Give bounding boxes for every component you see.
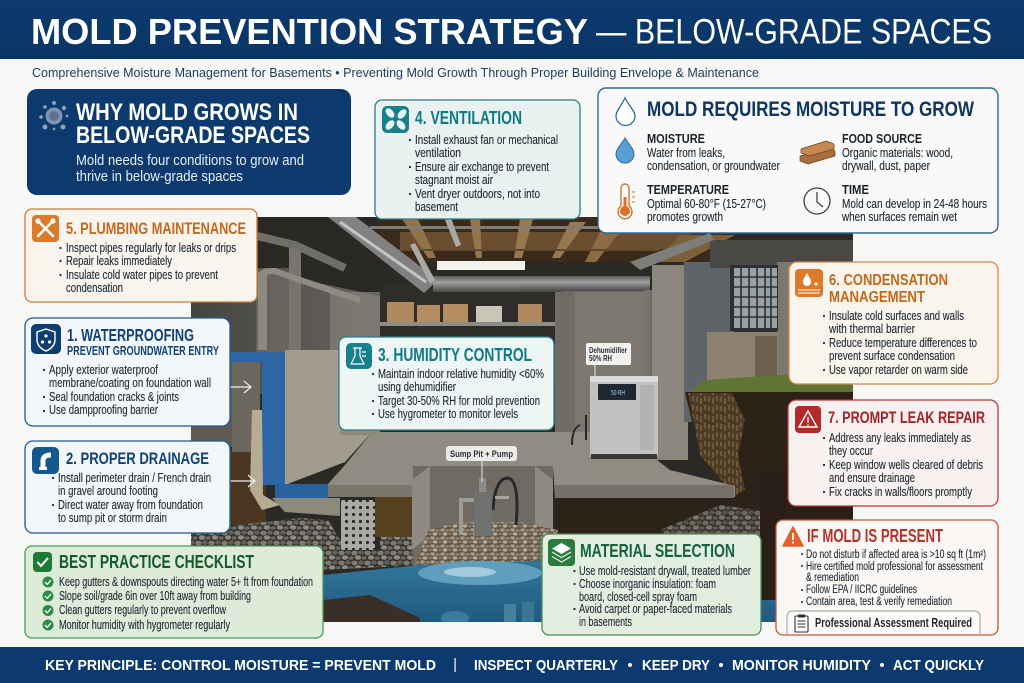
bullet list: they occur xyxy=(829,444,873,458)
bullet list: Fix cracks in walls/floors promptly xyxy=(829,485,973,499)
perforated drain xyxy=(341,500,375,550)
item: temperature: TEMPERATURE xyxy=(647,182,729,197)
bullet list: stagnant moist air xyxy=(415,173,493,187)
description: Mold needs four conditions to grow and xyxy=(76,153,304,169)
item: food source: drywall, dust, paper xyxy=(842,159,930,173)
panel: 3 humidity control xyxy=(339,337,554,430)
icon: drain pipe xyxy=(32,447,59,474)
bullet list xyxy=(823,309,977,377)
item: moisture: Water from leaks, xyxy=(647,146,725,160)
icon: shield xyxy=(31,324,61,354)
bullet list: Contain area, test & verify remediation xyxy=(806,596,952,608)
dehumidifier: 50 RH xyxy=(611,390,625,397)
key principle: KEY PRINCIPLE: CONTROL MOISTURE = PREVENT MOLD xyxy=(45,657,436,674)
action items: INSPECT QUARTERLY xyxy=(474,657,618,674)
callout: sump pit label: Sump Pit + Pump xyxy=(450,449,513,460)
bullet list: Direct water away from foundation xyxy=(58,498,203,512)
bullet list: Insulate cold surfaces and walls xyxy=(829,309,964,323)
panel: 4 ventilation xyxy=(375,100,580,219)
title: MOLD PREVENTION STRATEGY xyxy=(31,11,588,52)
checklist: Monitor humidity with hygrometer regularly xyxy=(59,618,231,632)
bullet list: and ensure drainage xyxy=(829,471,915,485)
icon: clipboard xyxy=(795,614,808,632)
bullet list xyxy=(372,367,544,421)
icon: clock xyxy=(804,188,830,214)
panel: 7 prompt leak repair xyxy=(788,400,998,506)
icon: flask xyxy=(346,343,372,369)
soil left xyxy=(230,450,266,525)
item: food source: Organic materials: wood, xyxy=(842,146,953,160)
bullet list: membrane/coating on foundation wall xyxy=(49,376,211,390)
bullet list xyxy=(823,431,983,499)
bullet list: Target 30-50% RH for mold prevention xyxy=(378,394,540,408)
bullet list: Reduce temperature differences to xyxy=(829,336,977,350)
bullet list: in basements xyxy=(579,615,632,629)
heading: IF MOLD IS PRESENT xyxy=(807,526,943,546)
bullet list: prevent surface condensation xyxy=(829,349,955,363)
bullet list: Install perimeter drain / French drain xyxy=(58,471,211,485)
icon: checkmark badge xyxy=(33,552,52,572)
grass xyxy=(690,374,853,392)
water xyxy=(324,560,776,622)
panel: 1 waterproofing xyxy=(25,318,230,426)
heading: 1. WATERPROOFING xyxy=(67,325,194,345)
checklist xyxy=(42,575,313,632)
boxes xyxy=(387,302,414,323)
heading: 5. PLUMBING MAINTENANCE xyxy=(66,220,246,238)
panel: best practice checklist xyxy=(25,546,323,638)
bullet list: in gravel around footing xyxy=(58,484,158,498)
description xyxy=(76,153,304,185)
bullet list: Choose inorganic insulation: foam xyxy=(579,577,716,591)
blue waterproof membrane xyxy=(230,352,285,485)
bullet list: Seal foundation cracks & joints xyxy=(49,390,179,404)
subtitle: Comprehensive Moisture Management for Basements • Preventing Mold Growth Through Proper Building Envelope & Maintenance xyxy=(32,65,759,80)
heading: WHY MOLD GROWS IN xyxy=(76,99,298,126)
bullet list xyxy=(409,133,558,214)
icon: mold spore xyxy=(39,101,68,130)
overhead ducts and pipes xyxy=(328,217,438,293)
heading: PREVENT GROUNDWATER ENTRY xyxy=(67,344,219,358)
description: thrive in below-grade spaces xyxy=(76,169,243,185)
bullet list xyxy=(43,363,211,417)
heading xyxy=(67,325,219,358)
callout: professional assessment: Professional Assessment Required xyxy=(815,616,972,630)
callout: professional assessment xyxy=(787,611,980,634)
bullet list xyxy=(573,564,751,629)
icon: water drop outline xyxy=(616,98,635,126)
soil right xyxy=(685,392,853,498)
icon: lumber xyxy=(800,141,835,164)
heading: BEST PRACTICE CHECKLIST xyxy=(59,552,254,572)
icon: condensation drops xyxy=(795,269,823,297)
panel: if mold is present xyxy=(776,520,998,635)
bullet list: Vent dryer outdoors, not into xyxy=(415,187,540,201)
callout: sump pit label xyxy=(446,446,517,482)
bullet list: Install exhaust fan or mechanical xyxy=(415,133,558,147)
footer band xyxy=(0,647,1024,683)
heading: MATERIAL SELECTION xyxy=(580,541,735,561)
bullet list: Avoid carpet or paper-faced materials xyxy=(579,602,732,616)
vertical pipes on left xyxy=(289,245,301,350)
callout: dehumidifier label: Dehumidifier xyxy=(589,345,628,355)
icon: wrench and screwdriver xyxy=(32,215,59,242)
gravel bed xyxy=(191,518,413,570)
window xyxy=(730,265,778,331)
checklist: Keep gutters & downspouts directing water 5+ ft from foundation xyxy=(59,575,313,589)
bullet list: using dehumidifier xyxy=(378,380,456,394)
arrow: drainage to footing xyxy=(229,475,255,487)
heading: 3. HUMIDITY CONTROL xyxy=(378,344,532,365)
left wall xyxy=(191,270,380,394)
heading: 6. CONDENSATION xyxy=(829,272,948,289)
heading: 4. VENTILATION xyxy=(415,107,522,128)
back wall and shelves xyxy=(380,296,420,336)
icon: fan xyxy=(382,106,409,133)
callout: dehumidifier label: 50% RH xyxy=(589,353,612,363)
bullet list: Use hygrometer to monitor levels xyxy=(378,407,518,421)
icon: thermometer xyxy=(618,184,635,219)
icon: blue drop xyxy=(616,138,634,163)
icon: alert triangle xyxy=(783,527,803,546)
item: moisture: MOISTURE xyxy=(647,131,705,146)
bullet list: condensation xyxy=(66,281,123,295)
bullet list xyxy=(59,241,236,295)
bullet list: Use mold-resistant drywall, treated lumber xyxy=(579,564,751,578)
panel: 6 condensation management xyxy=(789,262,998,384)
action items xyxy=(474,657,984,674)
bullet list: Use vapor retarder on warm side xyxy=(829,363,968,377)
item: temperature: promotes growth xyxy=(647,210,723,224)
arrow: waterproofing to membrane xyxy=(229,381,251,393)
item: food source: FOOD SOURCE xyxy=(842,131,922,146)
pump xyxy=(493,478,517,525)
bullet list xyxy=(52,471,211,525)
callout: dehumidifier label xyxy=(586,343,631,376)
bullet list: with thermal barrier xyxy=(828,322,915,336)
icon: warning triangle xyxy=(795,406,821,433)
panel: why mold grows xyxy=(27,89,351,195)
panel: 2 proper drainage xyxy=(25,441,230,533)
item: food source xyxy=(800,131,953,173)
bullet list: Inspect pipes regularly for leaks or drips xyxy=(66,241,236,255)
checklist: Slope soil/grade 6in over 10ft away from building xyxy=(59,589,251,603)
item: time: when surfaces remain wet xyxy=(841,210,957,224)
bullet list: Address any leaks immediately as xyxy=(829,431,971,445)
item: temperature xyxy=(618,182,766,224)
bullet list: Follow EPA / IICRC guidelines xyxy=(806,584,917,596)
item: moisture: condensation, or groundwater xyxy=(647,159,780,173)
bullet list: Repair leaks immediately xyxy=(66,254,173,268)
dehumidifier xyxy=(590,376,658,459)
floor slab xyxy=(327,432,735,497)
buried pipes xyxy=(441,611,469,622)
action items: KEEP DRY xyxy=(642,657,710,674)
item: time: Mold can develop in 24-48 hours xyxy=(842,197,987,211)
bullet list: Apply exterior waterproof xyxy=(49,363,158,377)
ceiling wood xyxy=(380,217,725,262)
bullet list: & remediation xyxy=(806,572,859,584)
bullet list: Use dampproofing barrier xyxy=(49,403,158,417)
bullet list: board, closed-cell spray foam xyxy=(579,590,697,604)
divider xyxy=(454,658,456,672)
heading: MANAGEMENT xyxy=(829,289,925,306)
panel: 5 plumbing maintenance xyxy=(25,209,257,302)
illustration: basement cross-section xyxy=(191,217,855,625)
foundation wall xyxy=(285,350,370,484)
window ledge xyxy=(707,332,778,380)
bullet list xyxy=(801,549,986,608)
item: time xyxy=(804,182,987,224)
heading: 2. PROPER DRAINAGE xyxy=(66,449,209,468)
heading xyxy=(829,272,948,306)
bullet list: ventilation xyxy=(415,146,461,160)
icon: layered materials xyxy=(548,539,575,566)
right concrete wall xyxy=(555,290,652,432)
action items: ACT QUICKLY xyxy=(893,657,984,674)
checklist: Clean gutters regularly to prevent overflow xyxy=(59,603,227,617)
sub-slab soil by drain xyxy=(375,497,412,537)
bullet list: basement xyxy=(415,200,458,214)
bullet list: Maintain indoor relative humidity <60% xyxy=(378,367,544,381)
bullet list: Insulate cold water pipes to prevent xyxy=(66,268,218,282)
header band xyxy=(0,0,1024,59)
item: time: TIME xyxy=(842,182,869,197)
heading: BELOW-GRADE SPACES xyxy=(76,122,310,149)
sump pit xyxy=(413,466,553,566)
item: moisture xyxy=(616,131,780,173)
panel: material selection xyxy=(542,534,761,635)
action items: MONITOR HUMIDITY xyxy=(732,657,871,674)
panel: mold requires moisture xyxy=(598,88,998,233)
bullet list: Ensure air exchange to prevent xyxy=(415,160,549,174)
item: temperature: Optimal 60-80°F (15-27°C) xyxy=(647,197,766,211)
bullet list: to sump pit or storm drain xyxy=(58,511,167,525)
gravel right xyxy=(660,505,760,536)
heading xyxy=(76,99,310,149)
